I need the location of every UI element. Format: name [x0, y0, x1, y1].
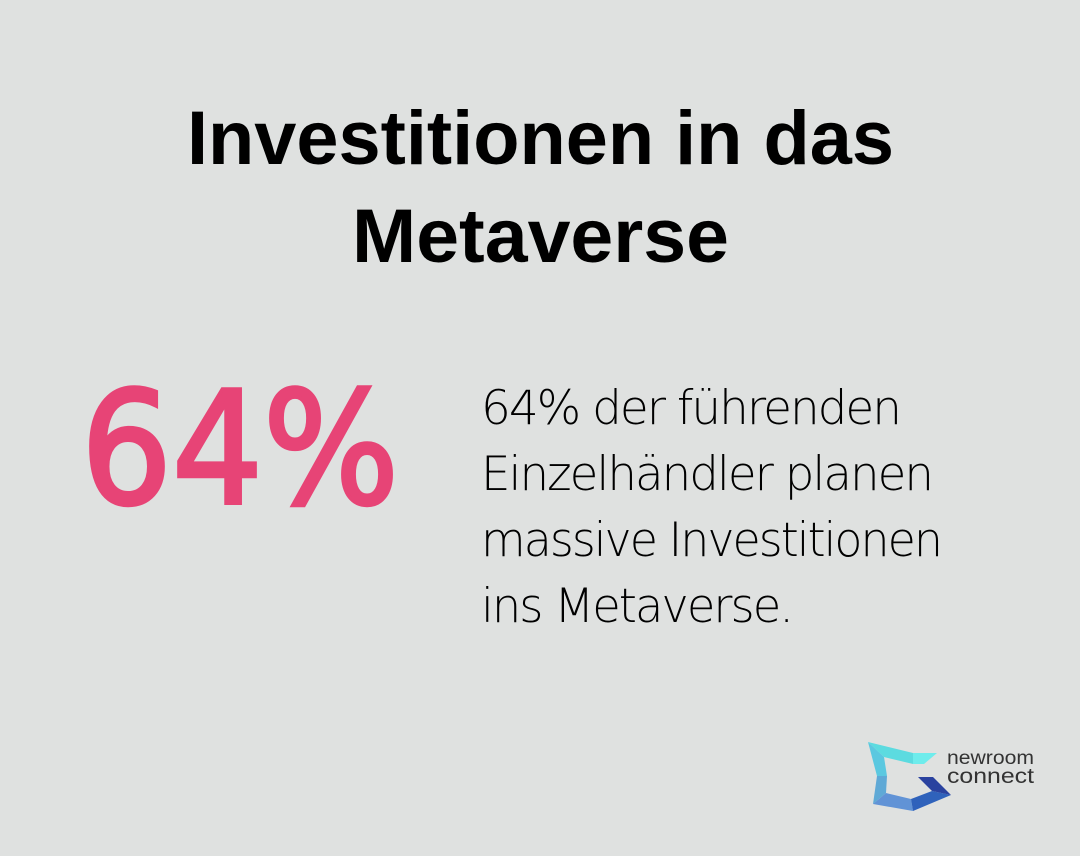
description text: Einzelhändler planen: [481, 447, 932, 502]
title: [187, 96, 894, 279]
title: Metaverse: [352, 194, 729, 279]
icon: logo mark: [868, 742, 951, 811]
logo wordmark: connect: [947, 765, 1034, 788]
description text: massive Investitionen: [481, 513, 941, 568]
logo wordmark: [947, 748, 1034, 788]
title: Investitionen in das: [187, 96, 894, 181]
logo: newroom connect: [868, 742, 1034, 811]
logo wordmark: newroom: [947, 748, 1034, 769]
description text: 64% der führenden: [481, 381, 900, 436]
description text: ins Metaverse.: [481, 579, 792, 634]
big statistic: 64%: 64%: [81, 358, 399, 540]
description text: [481, 381, 941, 634]
